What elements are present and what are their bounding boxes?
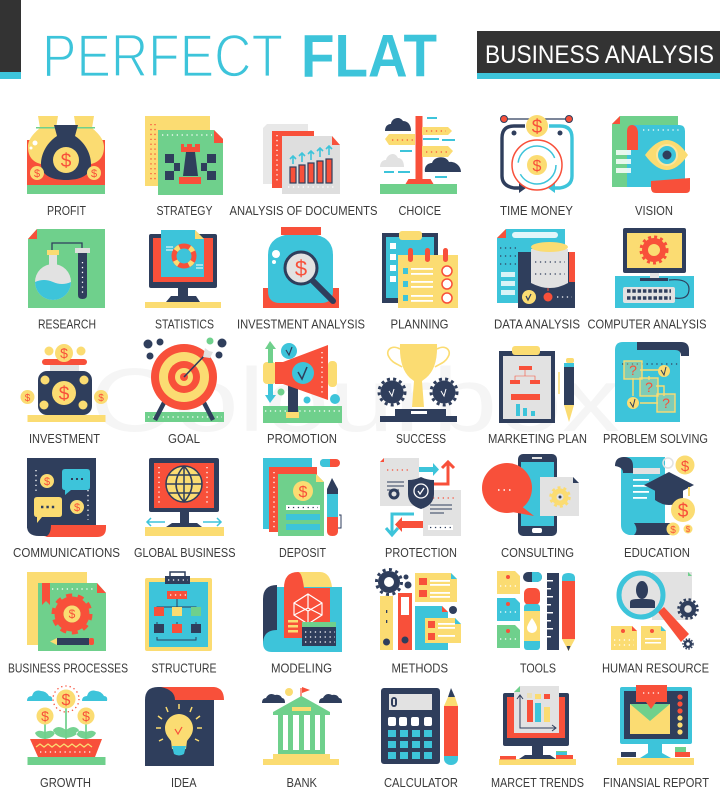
- cell: tools: [497, 571, 575, 676]
- cell: profit: [27, 116, 105, 218]
- icon: graduation cap and scroll: [615, 456, 695, 536]
- label: RESEARCH: [38, 316, 96, 332]
- label: INVESTMENT: [29, 431, 100, 446]
- icon: phone and speech bubble: [482, 454, 579, 536]
- icon: jar with coins: $: [98, 393, 104, 404]
- icon: money bags: $: [61, 151, 72, 172]
- icon: graduation cap and scroll: $: [670, 525, 676, 536]
- cell: communications: [13, 458, 120, 560]
- icon: monitor with life ring: [145, 230, 221, 308]
- label: CONSULTING: [501, 545, 574, 560]
- icon: money plants: $: [82, 708, 90, 724]
- label: BANK: [286, 775, 317, 790]
- label: PLANNING: [390, 316, 448, 332]
- icon: money bags: $: [34, 168, 40, 180]
- cell: deposit: [263, 458, 341, 560]
- icon: map with question marks: ?: [662, 395, 670, 411]
- icon: graduation cap and scroll: $: [681, 458, 690, 475]
- cell: data analysis: [494, 229, 580, 332]
- label: COMMUNICATIONS: [13, 545, 120, 560]
- cell: planning: [382, 231, 458, 332]
- icon: jar with coins: $: [25, 393, 31, 404]
- icon: clipboard and pen: [499, 346, 574, 423]
- icon: coin and clock: $: [532, 117, 543, 138]
- cell: problem solving: [603, 342, 708, 446]
- icon: coin and clock: $: [533, 158, 542, 175]
- icon: clipboard and checklist: [382, 231, 458, 308]
- cell: modeling: [263, 572, 342, 676]
- cell: bank: [262, 687, 342, 790]
- icon: flowchart clipboard: [145, 572, 212, 651]
- icon: database on panel: [497, 229, 575, 308]
- cell: analysis of documents: [230, 124, 378, 218]
- label: STATISTICS: [155, 316, 214, 332]
- icon: jar with magnifier: $: [295, 256, 307, 281]
- icon: documents and pen: $: [299, 484, 308, 501]
- cell: strategy: [145, 116, 223, 218]
- label: STRUCTURE: [152, 660, 217, 676]
- icon: computer with gear: [615, 228, 694, 308]
- icon: chat scroll: $: [74, 502, 80, 514]
- icon: monitor with chart: [499, 686, 576, 765]
- label: SUCCESS: [396, 431, 446, 446]
- icon: megaphone: [263, 341, 342, 423]
- cell: global business: [134, 458, 236, 560]
- cell: choice: [380, 116, 461, 218]
- cell: time money: [500, 115, 573, 218]
- icon: documents with bar chart: [263, 124, 340, 194]
- cell: growth: [27, 686, 107, 790]
- title: FLAT: [301, 22, 437, 90]
- cell: investment analysis: [237, 227, 365, 332]
- icon: flask and test tube: [28, 229, 105, 308]
- label: DATA ANALYSIS: [494, 316, 580, 332]
- label: TOOLS: [520, 660, 556, 676]
- label: PROTECTION: [385, 545, 457, 560]
- label: TIME MONEY: [500, 203, 573, 218]
- icon: coin and clock: [500, 115, 572, 193]
- cell: education: [615, 456, 695, 560]
- label: GLOBAL BUSINESS: [134, 545, 236, 560]
- icon: chess rook on documents: [145, 116, 223, 195]
- icon: monitor with globe: [145, 458, 224, 536]
- icon: money plants: [27, 686, 107, 765]
- subtitle badge: [477, 31, 720, 79]
- label: VISION: [635, 203, 673, 218]
- cell: marcet trends: [491, 686, 584, 790]
- header corner block: [0, 0, 21, 79]
- cell: business processes: [8, 572, 128, 676]
- icon: 3D model blueprint: [263, 572, 342, 652]
- icon: money plants: $: [62, 692, 71, 709]
- icon: jar with coins: $: [59, 384, 70, 405]
- label: IDEA: [171, 775, 197, 790]
- cell: success: [379, 344, 457, 446]
- icon: money plants: $: [41, 708, 49, 724]
- label: MARCET TRENDS: [491, 775, 584, 790]
- cell: idea: [145, 687, 224, 790]
- icon: shield and documents: [380, 458, 461, 536]
- label: CALCULATOR: [384, 775, 458, 790]
- cell: consulting: [482, 454, 579, 560]
- icon: jar with coins: [20, 344, 108, 422]
- label: STRATEGY: [156, 203, 213, 218]
- icon: trophy and gears: [379, 344, 457, 422]
- icon: graduation cap and scroll: $: [686, 525, 691, 534]
- icon: jar with coins: $: [60, 345, 68, 361]
- icon: gear on document: $: [69, 607, 76, 621]
- label: PROFIT: [47, 203, 86, 218]
- icon: magnifier with person stamp: [611, 572, 698, 650]
- cell: calculator: [381, 688, 458, 790]
- icon: calculator and pencil: [381, 688, 458, 765]
- watermark: Colourbox: [90, 351, 620, 451]
- icon: money bags: [27, 116, 105, 194]
- label: GROWTH: [40, 775, 91, 790]
- icon: signpost with clouds: [380, 116, 461, 194]
- cell: vision: [612, 116, 690, 218]
- cell: marketing plan: [488, 346, 587, 446]
- icon: target with arrow: [144, 338, 226, 422]
- icon: stationery: [497, 571, 575, 651]
- icon: gear, binders, notes: [376, 570, 461, 650]
- label: ANALYSIS OF DOCUMENTS: [230, 203, 378, 218]
- label: BUSINESS PROCESSES: [8, 660, 128, 676]
- cell: finansial report: [603, 685, 709, 790]
- cell: investment: [20, 344, 108, 446]
- cell: goal: [144, 338, 226, 446]
- cell: statistics: [145, 230, 221, 332]
- label: INVESTMENT ANALYSIS: [237, 316, 365, 332]
- icon: eye on document: [612, 116, 690, 193]
- icon: chat scroll: $: [44, 476, 50, 488]
- label: DEPOSIT: [279, 545, 326, 560]
- label: MARKETING PLAN: [488, 431, 587, 446]
- label: CHOICE: [398, 203, 441, 218]
- title: PERFECT: [42, 22, 283, 90]
- icon: map with question marks: [615, 342, 689, 422]
- cell: structure: [145, 572, 217, 676]
- cell: computer analysis: [588, 228, 707, 332]
- cell: protection: [380, 458, 461, 560]
- icon: chat scroll: [27, 458, 106, 537]
- icon: monitor with envelope: [617, 685, 694, 765]
- label: PROMOTION: [267, 431, 337, 446]
- cell: human resource: [602, 572, 709, 676]
- icon: light bulb scroll: [145, 687, 224, 766]
- cell: promotion: [263, 341, 342, 446]
- cell: methods: [376, 570, 461, 676]
- cell: research: [28, 229, 105, 332]
- icon: map with question marks: ?: [629, 362, 637, 378]
- icon: graduation cap and scroll: $: [678, 501, 689, 522]
- icon: map with question marks: ?: [645, 379, 653, 395]
- icon: money bags: $: [91, 168, 97, 180]
- icon: bank building: [262, 687, 342, 765]
- label: MODELING: [271, 660, 332, 676]
- label: EDUCATION: [624, 545, 690, 560]
- label: METHODS: [392, 660, 448, 676]
- label: GOAL: [168, 431, 200, 446]
